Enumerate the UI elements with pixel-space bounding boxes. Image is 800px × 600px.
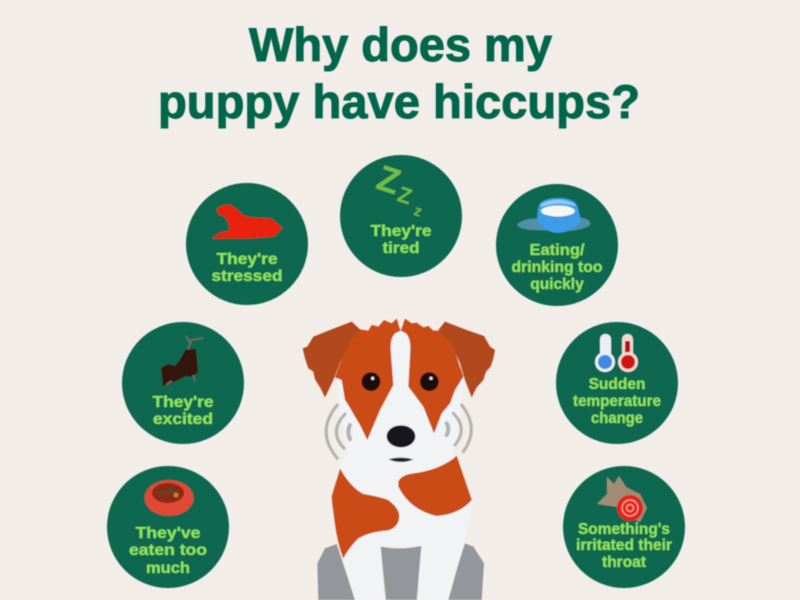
dog chest patch left [332,468,399,558]
dog legs [317,543,484,600]
title [158,18,640,128]
icon: cold thermometer [595,334,615,372]
icon: jumping dog [161,336,203,386]
panel: they've eaten too much: eaten too [129,542,207,559]
panel: sudden temperature change [556,322,678,444]
dog right ear [438,322,495,397]
dog right forehead patch [401,319,463,433]
icon: zzz: Z [395,182,415,209]
icon: zzz [372,157,424,221]
panel: they're stressed [186,183,308,305]
panel: sudden temperature change: Sudden [589,376,645,393]
panel: eating or drinking too quickly: quickly [530,276,584,293]
icon: dog throat [597,476,647,522]
panel: sudden temperature change: temperature [573,393,661,410]
dog left ear [303,322,360,397]
panel: something's irritated their throat: irritated their [576,537,672,554]
panel: they're tired: tired [382,240,420,257]
hiccup waves right [447,405,471,452]
panel: eating or drinking too quickly: drinking too [512,259,602,276]
panel: something's irritated their throat [563,466,685,588]
panel: they're stressed: They're [216,251,278,268]
icon: zzz: z [412,202,424,221]
dog white body and head [332,323,473,600]
dog chest patch right [398,456,472,516]
panel: they've eaten too much: They've [136,525,201,542]
panel: something's irritated their throat: throat [602,554,646,571]
icon: hot thermometer [618,334,638,372]
title: Why does my [249,18,552,71]
panel: they've eaten too much: much [146,560,190,577]
icon: zzz: Z [372,157,406,202]
panel: they're tired: They're [370,223,432,240]
panel: they're excited: excited [153,411,213,428]
panel: they're excited [122,322,244,444]
icon: water bowl [517,198,590,233]
dog left forehead patch [335,319,401,440]
dog nose [387,425,415,447]
dog illustration [303,319,495,600]
panel: they've eaten too much [107,466,229,588]
icon: food bowl [144,480,194,516]
panel: something's irritated their throat: Something's [578,521,670,538]
dog centre chest [381,546,421,600]
panel: eating or drinking too quickly [496,184,618,306]
dog mouth [388,458,413,462]
icon: red lying dog [213,205,282,238]
panel: they're tired [340,155,462,277]
dog eyes [362,372,439,391]
panel: sudden temperature change: change [591,410,643,427]
hiccup waves left [326,405,350,458]
panel: they're excited: They're [152,394,214,411]
title: puppy have hiccups? [158,75,640,128]
panel: eating or drinking too quickly: Eating/ [530,242,585,259]
panel: they're stressed: stressed [212,268,282,285]
